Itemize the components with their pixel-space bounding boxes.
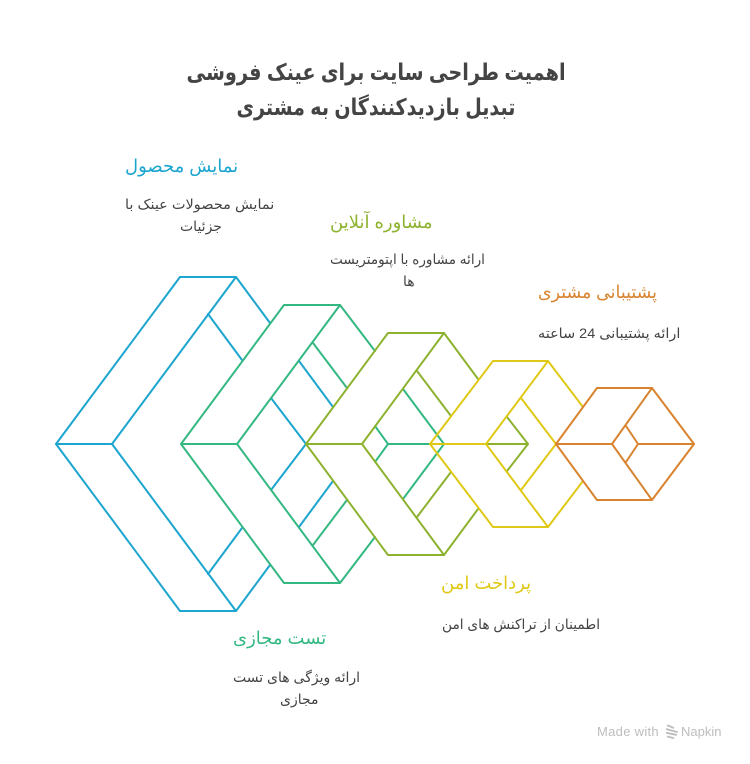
label: product display: نمایش محصولات عینک با [125, 196, 274, 212]
yellow segment [430, 361, 583, 527]
label: customer support: ارائه پشتیبانی 24 ساعته [538, 325, 680, 341]
label: virtual try-on: ارائه ویژگی های تست [233, 669, 360, 685]
label: product display [125, 156, 274, 234]
title: اهمیت طراحی سایت برای عینک فروشی [186, 59, 566, 85]
label: virtual try-on: تست مجازی [233, 628, 326, 648]
label: customer support: پشتیبانی مشتری [538, 282, 657, 302]
label: secure payment [441, 573, 600, 632]
label: secure payment: اطمینان از تراکنش های امن [442, 616, 600, 632]
blue segment [56, 277, 333, 611]
title [186, 59, 566, 120]
label: online consultation [330, 210, 485, 289]
label: online consultation: مشاوره آنلاین [330, 212, 432, 232]
label: product display: نمایش محصول [125, 156, 238, 176]
icon: Napkin logo [666, 724, 678, 739]
green segment [181, 305, 444, 583]
label: online consultation: ارائه مشاوره با اپتومتریست [330, 251, 485, 267]
label: virtual try-on [233, 628, 360, 708]
orange segment [556, 388, 694, 500]
label: customer support [538, 282, 680, 342]
title: تبدیل بازدیدکنندگان به مشتری [237, 94, 515, 120]
olive segment [306, 333, 528, 555]
label: secure payment: پرداخت امن [441, 573, 531, 593]
label: product display: جزئیات [180, 218, 222, 234]
watermark: Made with Napkin: Made with [597, 724, 659, 739]
watermark: Made with Napkin [597, 724, 721, 739]
label: virtual try-on: مجازی [280, 691, 319, 707]
watermark: Made with Napkin: Napkin [681, 724, 721, 739]
label: online consultation: ها [403, 273, 415, 289]
